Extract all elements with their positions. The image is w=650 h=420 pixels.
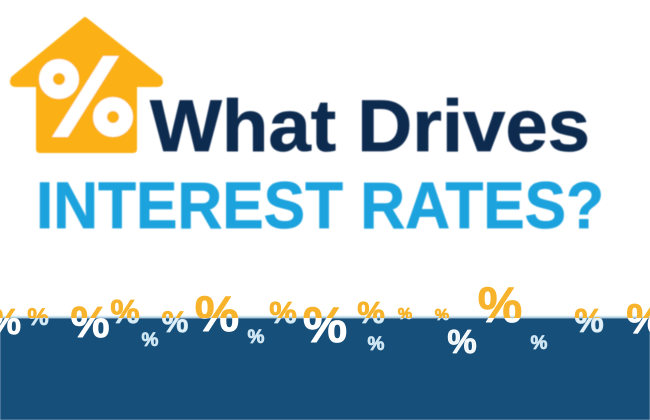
percent signs inside the band (white and pale blue): % — [447, 323, 477, 360]
percent signs above the band (yellow): % — [398, 306, 412, 323]
percent signs above the band (yellow): % — [70, 298, 110, 347]
percent signs inside the band (white and pale blue): % — [142, 330, 159, 351]
percent signs inside the band (white and pale blue): % — [368, 334, 385, 355]
percent signs above the band (yellow) — [0, 286, 650, 318]
percent signs inside the band (white and pale blue): % — [398, 306, 412, 323]
percent signs above the band (yellow): % — [27, 304, 49, 331]
title: What Drives: What Drives — [150, 86, 590, 167]
percent signs inside the band (white and pale blue): % — [303, 297, 347, 353]
subtitle: INTEREST RATES?: INTEREST RATES? — [36, 168, 604, 242]
percent signs inside the band (white and pale blue): % — [70, 298, 110, 347]
percent signs inside the band (white and pale blue): % — [269, 295, 297, 330]
percent signs above the band (yellow): % — [303, 297, 347, 353]
percent signs above the band (yellow): % — [435, 307, 449, 324]
percent signs above the band (yellow): % — [478, 277, 522, 333]
percent signs inside the band (white and pale blue): % — [531, 333, 548, 354]
percent signs above the band (yellow): % — [574, 302, 604, 339]
percent signs inside the band (white and pale blue): % — [357, 295, 385, 330]
percent signs above the band (yellow): % — [357, 295, 385, 330]
percent signs inside the band (white and pale blue): % — [110, 293, 140, 330]
percent signs above the band (yellow): % — [162, 306, 188, 339]
percent signs above the band (yellow): % — [269, 295, 297, 330]
percent signs inside the band (white and pale blue): % — [27, 304, 49, 331]
percent signs inside the band (white and pale blue): % — [248, 327, 265, 348]
icon: house with percent sign — [12, 19, 161, 151]
percent signs inside the band (white and pale blue): % — [435, 307, 449, 324]
percent signs inside the band (white and pale blue) — [0, 318, 650, 354]
percent signs inside the band (white and pale blue): % — [574, 302, 604, 339]
percent signs inside the band (white and pale blue): % — [162, 306, 188, 339]
percent signs inside the band (white and pale blue): % — [195, 286, 239, 342]
percent signs above the band (yellow): % — [195, 286, 239, 342]
percent signs above the band (yellow): % — [110, 293, 140, 330]
background band — [0, 316, 650, 420]
percent signs inside the band (white and pale blue): % — [478, 277, 522, 333]
